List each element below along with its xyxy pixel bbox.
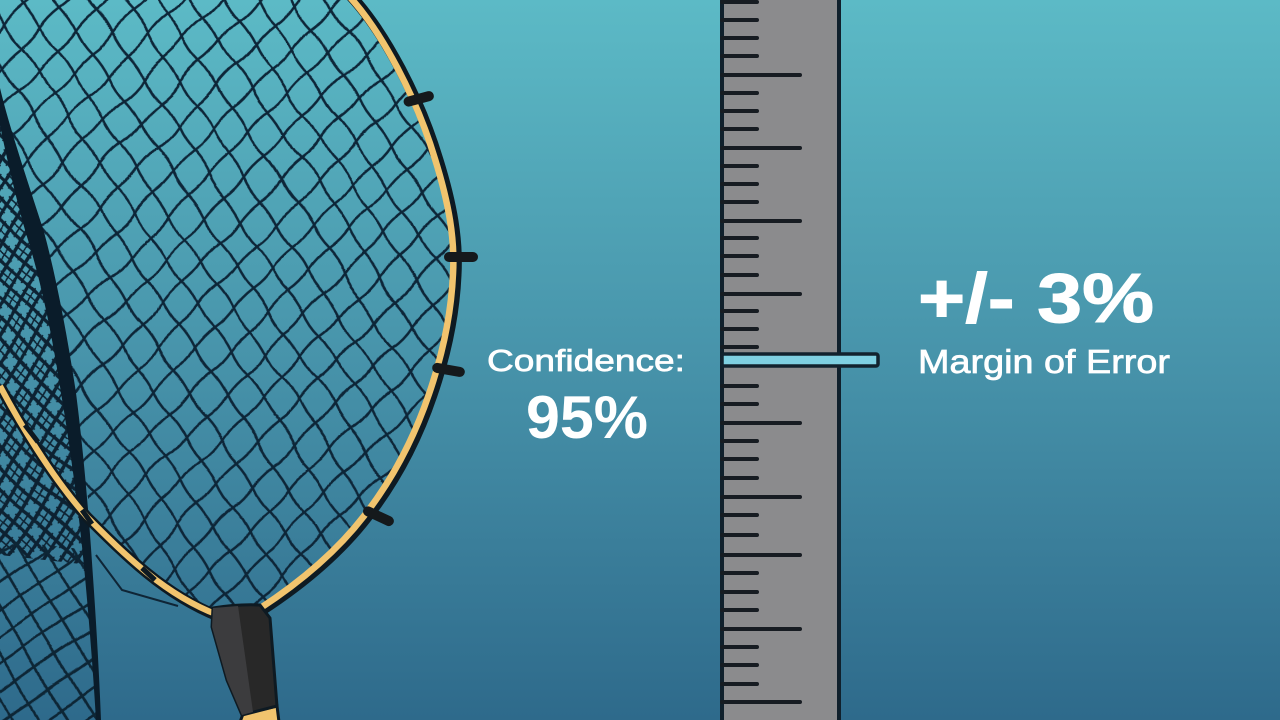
handle grip — [212, 605, 277, 715]
confidence label — [487, 343, 685, 451]
frame tab upper — [402, 90, 435, 108]
net frame — [0, 0, 456, 616]
margin marker bar — [722, 354, 878, 366]
margin caption: Margin of Error — [918, 343, 1170, 380]
frame tab lower — [431, 362, 466, 378]
wooden handle — [240, 706, 279, 720]
dense rear net mesh — [0, 125, 84, 564]
margin value: +/- 3% — [918, 259, 1154, 337]
main net mesh — [0, 0, 450, 608]
margin of error label — [918, 259, 1170, 380]
confidence caption: Confidence: — [487, 343, 685, 378]
landing net illustration — [0, 0, 500, 720]
frame tab bottom — [361, 505, 396, 528]
net fold band — [0, 88, 101, 720]
ruler tick marks — [722, 2, 800, 702]
net spill below frame — [96, 555, 178, 606]
confidence value: 95% — [526, 384, 648, 451]
hanging net mesh — [0, 542, 96, 720]
ruler body — [722, 0, 839, 720]
frame tab middle — [444, 252, 478, 262]
ruler — [722, 0, 878, 720]
